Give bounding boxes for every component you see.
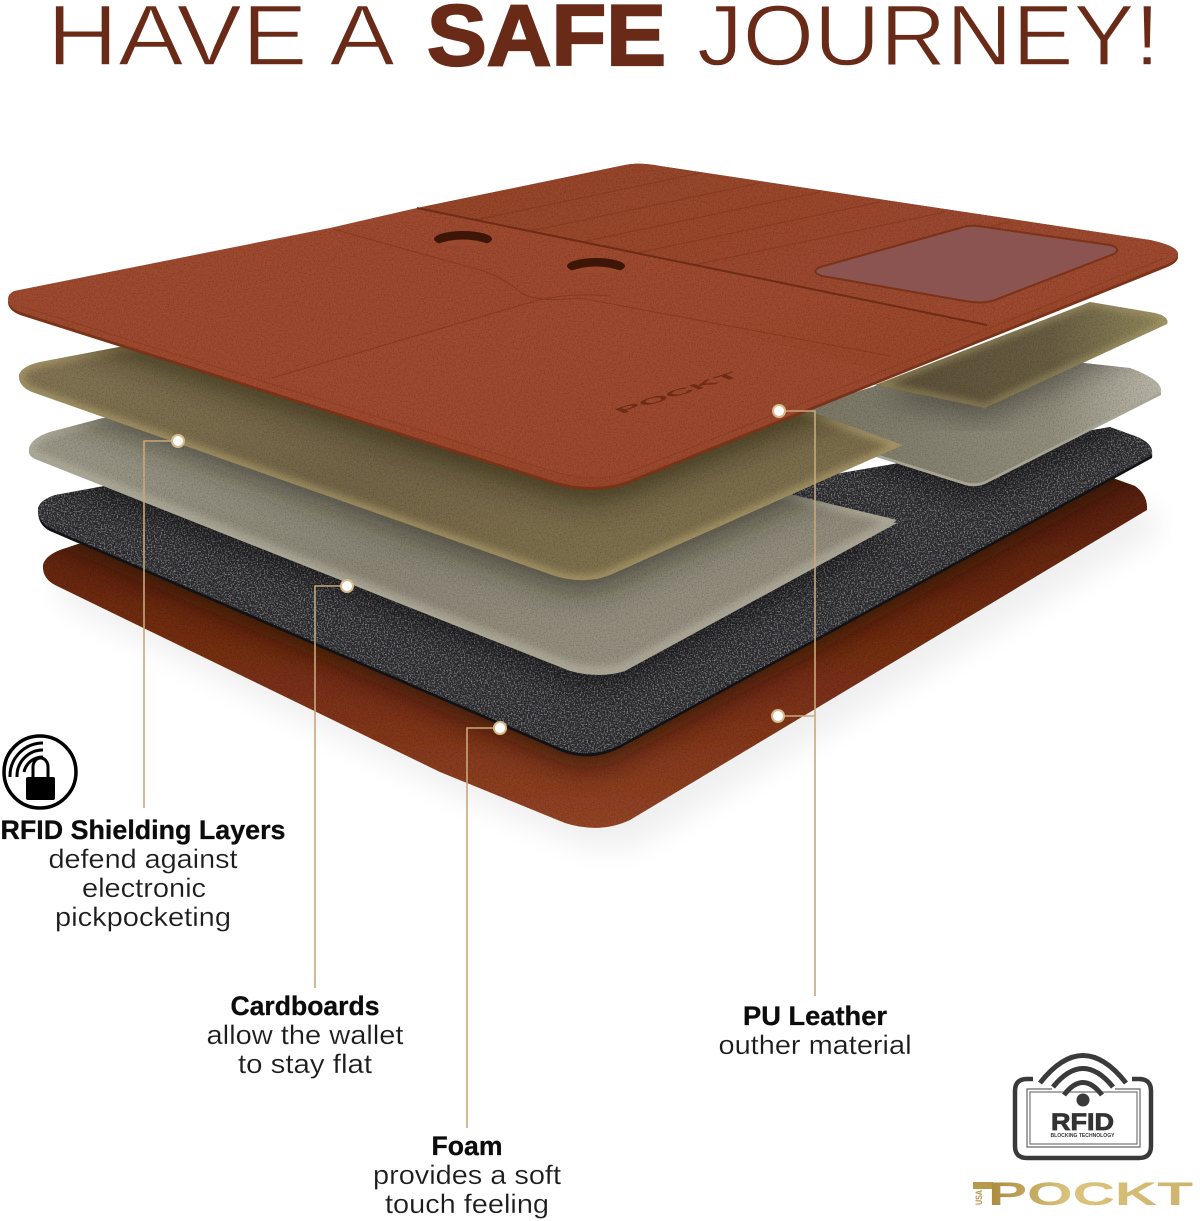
layer: right cardboard: [810, 362, 1162, 486]
leader: cardboards: [315, 580, 353, 988]
layer: right gold shielding: [875, 302, 1168, 408]
brand logo: USA POCKT: [973, 1176, 1194, 1212]
ground shadow: [57, 499, 1161, 850]
label: RFID Shielding Layers: defend against: [48, 844, 238, 874]
layer: bottom leather: [42, 478, 1148, 828]
stitching: [20, 229, 1165, 478]
badge: RFID blocking technology: BLOCKING TECHNOLOGY: [1050, 1133, 1115, 1139]
label: Foam: provides a soft: [373, 1160, 562, 1190]
label: Cardboards: Cardboards: [230, 991, 380, 1021]
ID window: [815, 226, 1117, 302]
layer: left cardboard: [28, 418, 897, 675]
label: RFID Shielding Layers: [0, 815, 286, 932]
brand logo: USA POCKT: POCKT: [988, 1176, 1194, 1212]
label: Cardboards: [206, 991, 404, 1079]
label: Foam: [373, 1131, 562, 1219]
icon: RFID lock: [4, 736, 76, 808]
label: PU Leather: PU Leather: [743, 1001, 887, 1031]
brand logo: USA POCKT: USA: [974, 1190, 984, 1205]
card slots: [476, 173, 1010, 265]
fold seam: [417, 208, 987, 325]
layer: top leather wallet: [8, 164, 1178, 490]
layer: foam: [38, 427, 1152, 756]
badge: RFID blocking technology: RFID: [1051, 1109, 1114, 1136]
leader: PU leather: [772, 405, 815, 996]
label: RFID Shielding Layers: RFID Shielding Layers: [0, 815, 286, 845]
badge: RFID blocking technology: [1015, 1056, 1151, 1158]
label: Cardboards: allow the wallet: [206, 1020, 404, 1050]
snap hole left: [434, 231, 492, 247]
leader: foam: [467, 722, 506, 1128]
label: PU Leather: outher material: [718, 1030, 912, 1060]
label: PU Leather: [718, 1001, 912, 1060]
layer: left gold shielding: [18, 346, 902, 580]
card side of the wallet: [417, 164, 1178, 325]
front pocket panel: [272, 295, 890, 480]
label: RFID Shielding Layers: electronic: [82, 873, 206, 903]
label: Foam: touch feeling: [385, 1189, 549, 1219]
embossed POCKT logo: POCKT: [610, 370, 746, 415]
label: Foam: Foam: [432, 1131, 502, 1161]
snap hole right: [567, 258, 625, 274]
title: [47, 0, 1160, 84]
label: RFID Shielding Layers: pickpocketing: [55, 902, 231, 932]
leader: RFID shielding: [144, 435, 184, 808]
label: Cardboards: to stay flat: [238, 1049, 373, 1079]
wallet exploded layers illustration: [8, 164, 1178, 850]
